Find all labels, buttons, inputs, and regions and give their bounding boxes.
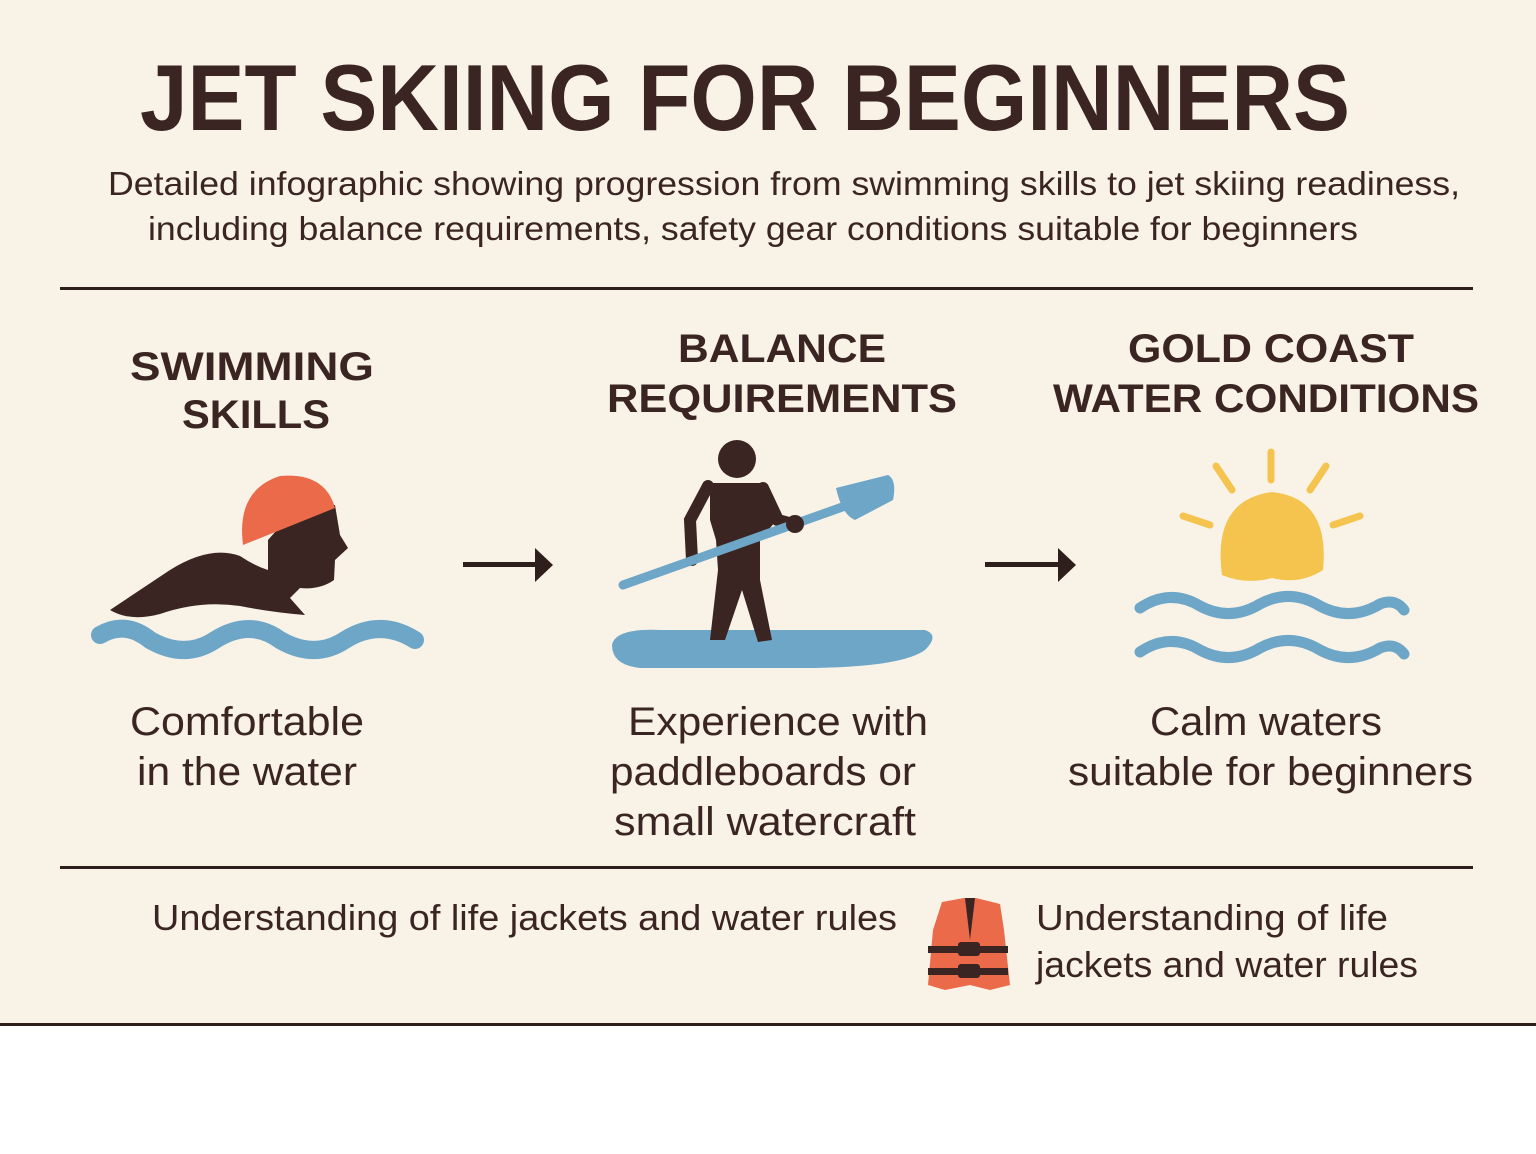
- title: JET SKIING FOR BEGINNERS: [140, 45, 1350, 150]
- heading: swimming skills: SKILLS: [182, 393, 330, 437]
- body: balance: Experience with: [628, 700, 928, 744]
- heading: balance: [607, 327, 957, 421]
- heading: conditions: GOLD COAST: [1128, 327, 1414, 371]
- heading: conditions: [1053, 327, 1479, 421]
- subtitle: [108, 165, 1460, 247]
- heading: balance: BALANCE: [678, 327, 886, 371]
- body: balance: small watercraft: [614, 800, 916, 844]
- body: balance: [610, 700, 928, 844]
- footer text left: Understanding of life jackets and water rules: [152, 897, 897, 938]
- arrow 1: [463, 548, 553, 582]
- icon: swimmer: [100, 476, 415, 650]
- icon: paddleboarder: [612, 440, 932, 668]
- body: balance: paddleboards or: [610, 750, 916, 794]
- body: conditions: [1068, 700, 1473, 794]
- heading: balance: REQUIREMENTS: [607, 377, 957, 421]
- icon: sun and waves: [1140, 452, 1404, 658]
- body: swimming: [130, 700, 364, 794]
- body: conditions: Calm waters: [1150, 700, 1382, 744]
- footer text right: [1035, 897, 1418, 985]
- body: conditions: suitable for beginners: [1068, 750, 1473, 794]
- footer text right: jackets and water rules: [1035, 944, 1418, 985]
- subtitle: Detailed infographic showing progression from swimming skills to jet skiing readiness,: [108, 165, 1460, 202]
- footer text right: Understanding of life: [1036, 897, 1388, 938]
- panel: swimming skills: [100, 345, 415, 794]
- panel: gold coast water conditions: [1053, 327, 1479, 794]
- heading: swimming skills: SWIMMING: [130, 345, 374, 389]
- heading: swimming skills: [130, 345, 374, 437]
- heading: conditions: WATER CONDITIONS: [1053, 377, 1479, 421]
- subtitle: including balance requirements, safety gear conditions suitable for beginners: [148, 210, 1358, 247]
- arrow 2: [985, 548, 1076, 582]
- body: swimming: in the water: [137, 750, 357, 794]
- body: swimming: Comfortable: [130, 700, 364, 744]
- icon: life jacket: [928, 898, 1010, 990]
- panel: balance requirements: [607, 327, 957, 844]
